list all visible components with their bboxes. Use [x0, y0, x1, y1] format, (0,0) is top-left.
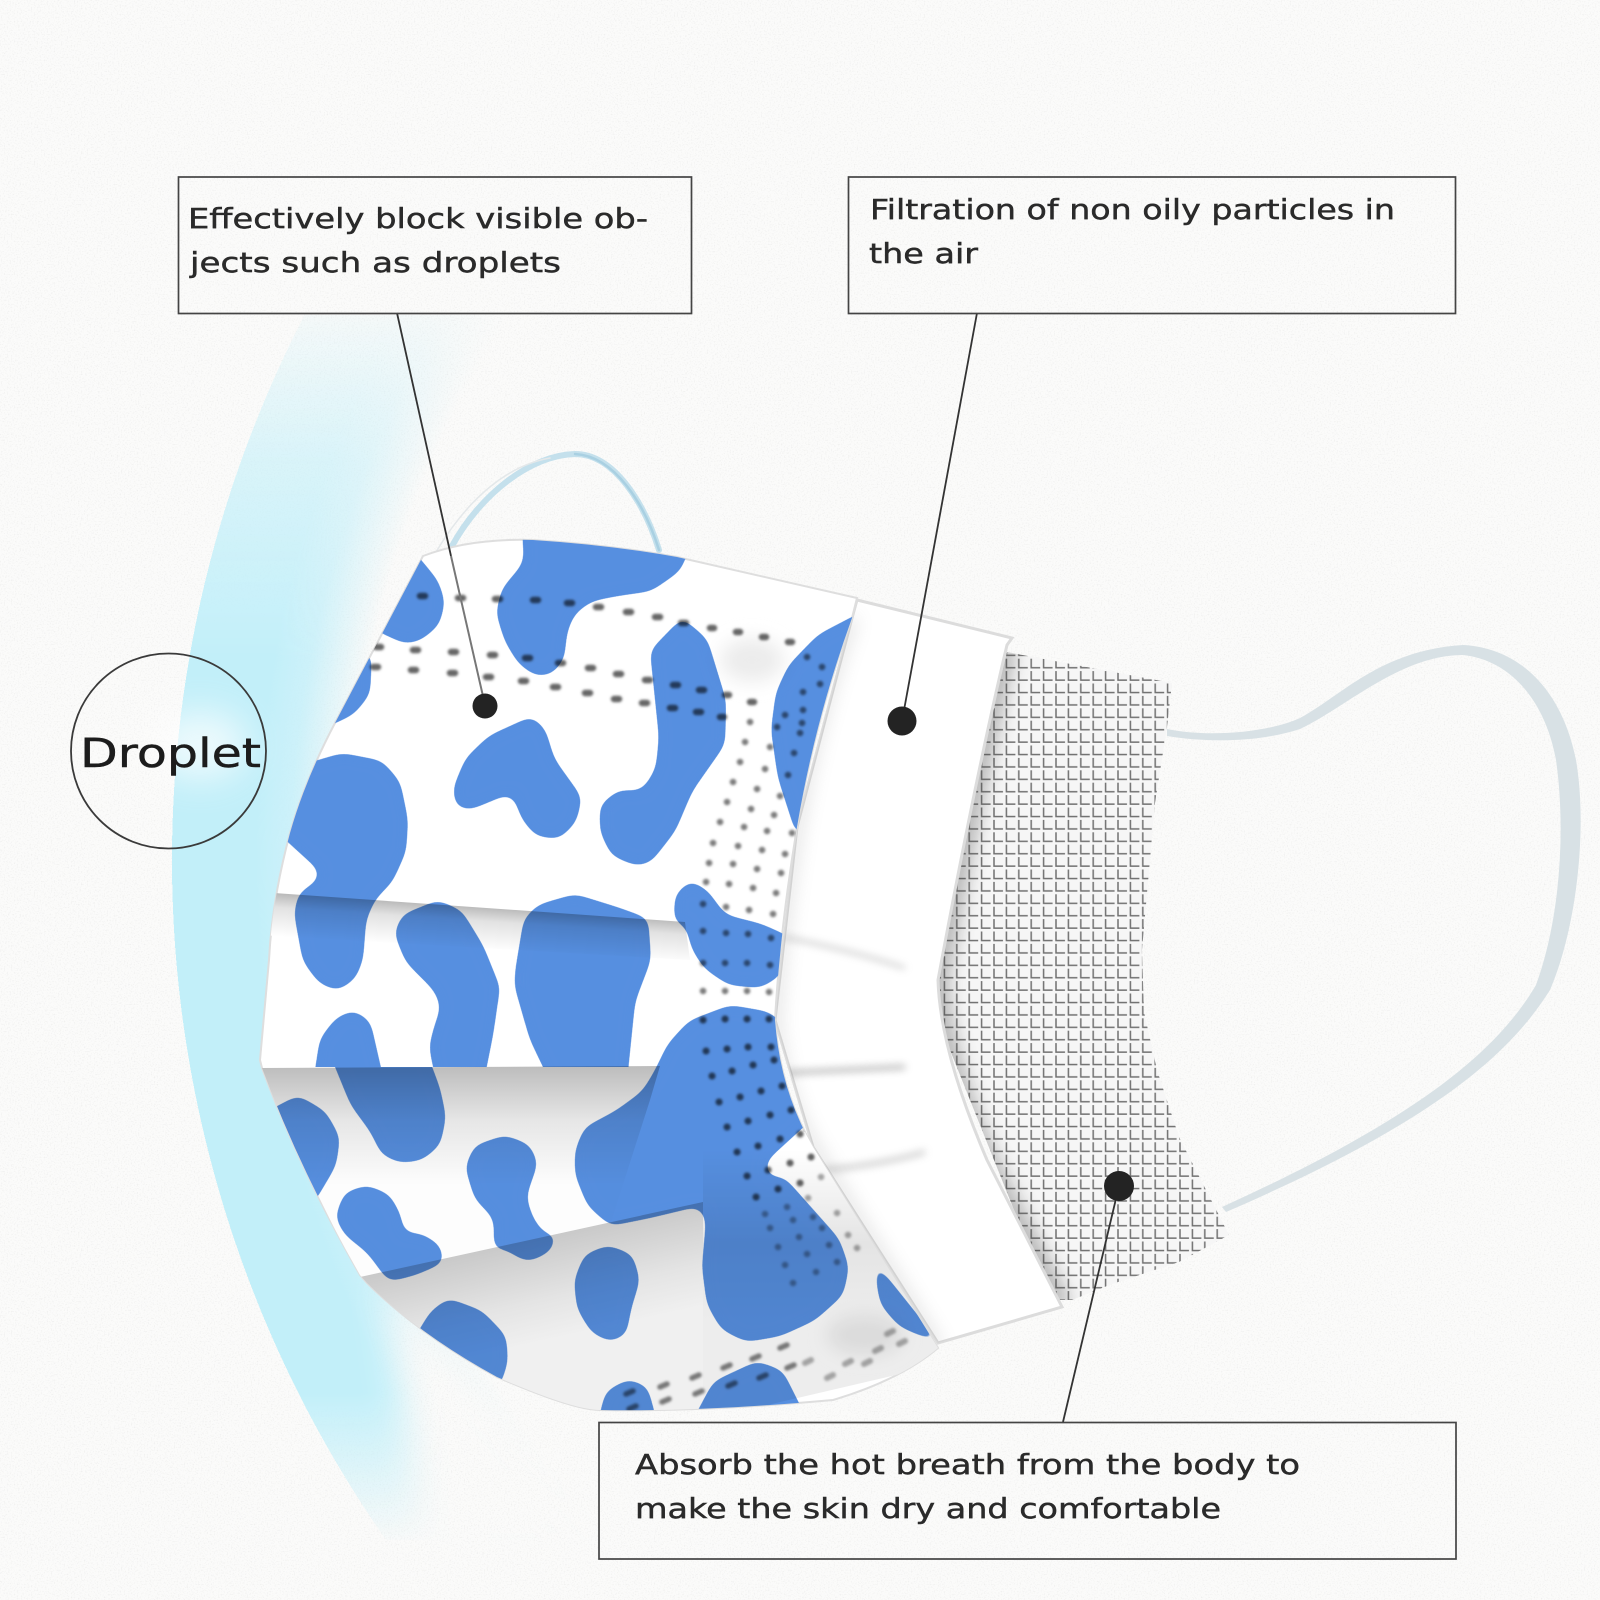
callout: inner layer leader line and dot [1063, 1171, 1134, 1422]
callout box: middle layer text: Filtration of non oily particles in [870, 193, 1395, 226]
label: droplet circle [71, 654, 266, 848]
callout box: inner layer text: Absorb the hot breath from the body to [635, 1448, 1300, 1481]
callout box: middle layer text [848, 177, 1456, 314]
callout: outer layer leader line and dot [397, 313, 498, 718]
white glow behind droplet label [152, 711, 248, 779]
label: droplet circle: Droplet [80, 731, 261, 777]
callout box: middle layer text: the air [869, 237, 979, 270]
callout box: outer layer text [178, 177, 692, 314]
panel: inner absorbent mesh layer [940, 652, 1229, 1300]
blue spots above the lower pleat [288, 540, 852, 1067]
callout box: inner layer text: make the skin dry and comfortable [635, 1492, 1221, 1525]
panel: printed outer layer [255, 525, 960, 1425]
blue spots below the lower pleat [262, 1003, 948, 1425]
panel: white middle filter layer [775, 600, 1062, 1348]
right ear loop [1167, 645, 1581, 1212]
callout box: inner layer text [599, 1422, 1456, 1559]
back ear loop [436, 454, 659, 552]
pale blue droplet shield arc [172, 326, 440, 1526]
fold shadows [255, 892, 960, 1425]
pale blurred fabric smudges [720, 638, 903, 1355]
callout: middle layer leader line and dot [888, 313, 977, 736]
callout box: outer layer text: Effectively block visible ob- [188, 202, 648, 235]
ventilation dot rows [373, 596, 905, 1409]
callout box: outer layer text: jects such as droplets [189, 246, 561, 279]
